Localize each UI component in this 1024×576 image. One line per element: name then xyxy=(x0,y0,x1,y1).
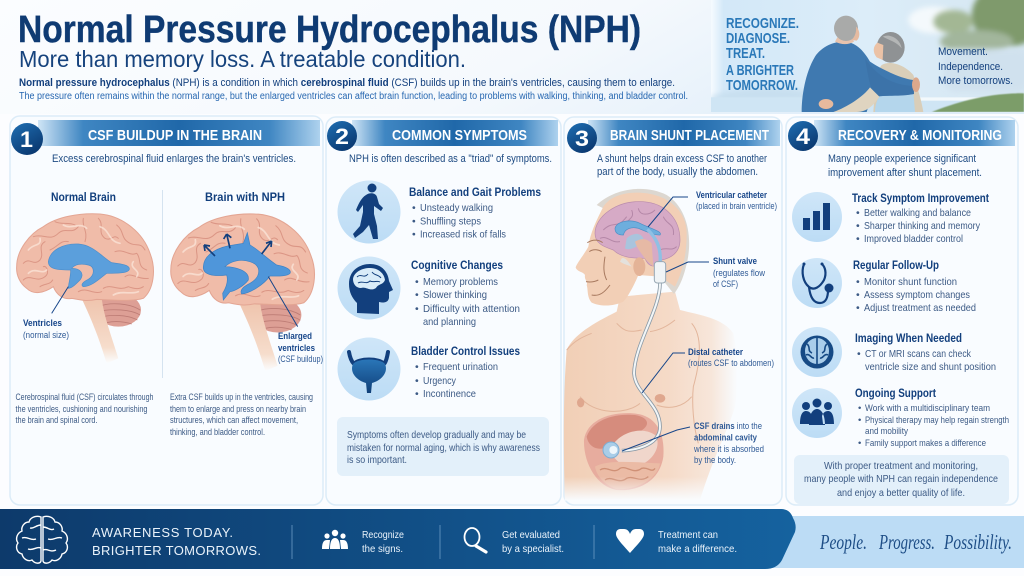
hero left text: A BRIGHTER xyxy=(726,62,794,79)
symptom: cognitive changes: and planning xyxy=(423,316,476,328)
item: regular follow-up: • xyxy=(856,276,860,288)
icon: people xyxy=(322,530,348,549)
panel 2: common symptoms xyxy=(326,117,561,505)
item: ongoing support: • xyxy=(858,438,861,449)
symptom: bladder control: Urgency xyxy=(423,375,457,387)
label: enlarged ventricles: (CSF buildup) xyxy=(278,354,323,364)
label: CSF drains: CSF drains into the xyxy=(694,421,762,431)
item: regular follow-up: Regular Follow-Up xyxy=(853,258,939,272)
label: ventricular catheter xyxy=(696,190,777,211)
item: ongoing support: • xyxy=(858,403,861,414)
panel 1 header: 1 xyxy=(20,127,33,152)
symptom: bladder control: Incontinence xyxy=(423,388,476,400)
symptom: balance and gait: • xyxy=(412,216,416,228)
illustration: brain with NPH xyxy=(171,214,314,371)
item: track symptom improvement: • xyxy=(856,207,860,219)
panel 3: brain shunt placement xyxy=(564,117,782,505)
text: extra CSF effects: them to enlarge and press on nearby brain xyxy=(170,404,306,415)
symptom: balance and gait: Increased risk of falls xyxy=(420,228,506,240)
symptom: cognitive changes: Slower thinking xyxy=(423,289,487,301)
panel 3 header: BRAIN SHUNT PLACEMENT xyxy=(610,127,769,144)
panel 3 intro: part of the body, usually the abdomen. xyxy=(597,166,758,178)
item: ongoing support: Family support makes a difference xyxy=(865,438,986,449)
label: ventricular catheter: Ventricular catheter xyxy=(696,190,767,201)
symptom: bladder control: Bladder Control Issues xyxy=(411,344,520,358)
illustration: man with shunt xyxy=(564,189,778,501)
panel 3 header: 3 xyxy=(575,126,589,151)
heading: normal brain: Normal Brain xyxy=(51,190,116,204)
symptom: cognitive changes xyxy=(411,258,520,328)
item: track symptom improvement: Track Symptom Improvement xyxy=(852,191,989,205)
symptom: balance and gait: Shuffling steps xyxy=(420,216,481,228)
panel 3 header xyxy=(567,120,780,153)
hero left text: TOMORROW. xyxy=(726,77,798,94)
symptom: balance and gait: • xyxy=(412,202,416,214)
symptom: balance and gait xyxy=(409,185,541,240)
symptom: cognitive changes: Cognitive Changes xyxy=(411,258,503,272)
item: ongoing support: Work with a multidisciplinary team xyxy=(865,403,990,414)
panel 3 intro xyxy=(597,153,767,178)
icon: brain outline xyxy=(17,516,67,563)
man xyxy=(802,16,920,112)
label: shunt valve: of CSF) xyxy=(713,279,738,289)
action: recognize: Recognize xyxy=(362,529,404,541)
label: CSF drains xyxy=(693,421,764,465)
icon: magnifier xyxy=(464,528,486,552)
label: CSF drains: abdominal cavity xyxy=(694,432,757,442)
symptom: cognitive changes: • xyxy=(415,276,419,288)
symptom: bladder control: • xyxy=(415,375,419,387)
hero left text: TREAT. xyxy=(726,45,765,62)
panel 4 header: 4 xyxy=(796,124,811,149)
symptom: balance and gait: Balance and Gait Problems xyxy=(409,185,541,199)
callout: awareness note: mistaken for normal aging, which is why awareness xyxy=(347,442,540,454)
label: shunt valve: Shunt valve xyxy=(713,256,757,267)
hero image: couple looking at landscape xyxy=(711,0,1024,112)
panel 4 intro xyxy=(828,153,982,179)
item: imaging when needed: ventricle size and shunt position xyxy=(865,361,996,373)
icon: walking person xyxy=(338,180,400,244)
text: normal CSF circulation: the brain and spinal cord. xyxy=(16,415,98,426)
symptom: bladder control: • xyxy=(415,361,419,373)
item: ongoing support: Ongoing Support xyxy=(855,386,936,400)
symptom: cognitive changes: • xyxy=(415,289,419,301)
item: regular follow-up: • xyxy=(856,289,860,301)
symptom: cognitive changes: • xyxy=(415,303,419,315)
panel 3 intro: A shunt helps drain excess CSF to another xyxy=(597,153,767,165)
item: track symptom improvement: Sharper thinking and memory xyxy=(864,220,981,232)
action: recognize xyxy=(362,529,404,555)
action: treatment: Treatment can xyxy=(658,529,718,541)
woman's arm xyxy=(819,87,879,112)
action: recognize: the signs. xyxy=(362,543,403,555)
item: regular follow-up: Assess symptom changes xyxy=(864,289,970,301)
callout: awareness note: Symptoms often develop gradually and may be xyxy=(347,429,526,441)
label: distal catheter: Distal catheter xyxy=(688,347,743,358)
icon: bar chart xyxy=(792,192,842,242)
slogan: Progress. xyxy=(878,530,935,554)
text: extra CSF effects: structures, which can affect movement, xyxy=(170,415,298,426)
panel 4 intro: improvement after shunt placement. xyxy=(828,167,982,179)
label: distal catheter: (routes CSF to abdomen) xyxy=(688,358,774,368)
label: enlarged ventricles xyxy=(278,331,323,364)
icon: bladder xyxy=(338,338,400,400)
hero right text: Movement. xyxy=(938,46,988,58)
panel 1 intro: Excess cerebrospinal fluid enlarges the brain's ventricles. xyxy=(52,153,296,165)
item: imaging when needed: • xyxy=(857,348,861,360)
label: CSF drains: where it is absorbed xyxy=(693,444,764,454)
item: track symptom improvement: • xyxy=(856,220,860,232)
panel 1: CSF buildup in the brain xyxy=(10,116,323,505)
callout: awareness note xyxy=(337,417,549,476)
illustration: normal brain xyxy=(17,214,153,363)
callout: quality of life: With proper treatment and monitoring, xyxy=(824,460,978,472)
icon: head with brain xyxy=(338,256,400,320)
intro text: Normal pressure hydrocephalus (NPH) is a condition in which cerebrospinal fluid (CSF) builds up in the brain's ventricles, causing them to enlarge. xyxy=(19,77,675,89)
subtitle: More than memory loss. A treatable condition. xyxy=(19,46,466,72)
text: normal CSF circulation xyxy=(16,392,154,426)
title: Normal Pressure Hydrocephalus (NPH) xyxy=(18,9,641,51)
panel 4 intro: Many people experience significant xyxy=(828,153,976,165)
item: ongoing support: • xyxy=(858,415,861,426)
hero right text xyxy=(938,46,1013,87)
icon: stethoscope xyxy=(792,258,842,308)
item: track symptom improvement: Better walking and balance xyxy=(864,207,971,219)
hero left text: RECOGNIZE. xyxy=(726,15,799,32)
action: treatment: make a difference. xyxy=(658,543,737,555)
footer banner xyxy=(0,509,1024,569)
slogan: People. xyxy=(819,530,867,554)
panel 1 header: CSF BUILDUP IN THE BRAIN xyxy=(88,127,262,144)
slogan xyxy=(819,530,1012,554)
symptom: bladder control: Frequent urination xyxy=(423,361,498,373)
label: ventricular catheter: (placed in brain ventricle) xyxy=(696,201,777,211)
item: ongoing support xyxy=(855,386,1009,449)
intro text xyxy=(19,77,688,102)
text: extra CSF effects: thinking, and bladder control. xyxy=(170,427,265,438)
label: shunt valve: (regulates flow xyxy=(713,268,765,278)
label: ventricles normal size xyxy=(23,318,69,340)
hero right text: Independence. xyxy=(938,61,1003,73)
action: treatment xyxy=(658,529,737,555)
trees xyxy=(933,0,1024,53)
callout: quality of life: and enjoy a better quality of life. xyxy=(837,487,965,499)
item: regular follow-up: Adjust treatment as needed xyxy=(864,302,976,314)
label: ventricles normal size: Ventricles xyxy=(23,318,62,329)
symptom: balance and gait: • xyxy=(412,228,416,240)
intro text: The pressure often remains within the normal range, but the enlarged ventricles can affect brain function, leading to problems with walking, thinking, and bladder control. xyxy=(19,91,688,102)
leader lines for shunt labels xyxy=(622,197,709,451)
footer tagline xyxy=(92,525,261,558)
icon: brain scan xyxy=(792,327,842,377)
panel 2 header xyxy=(327,120,558,151)
action: get evaluated: Get evaluated xyxy=(502,529,560,541)
item: regular follow-up xyxy=(853,258,976,314)
item: track symptom improvement: • xyxy=(856,233,860,245)
symptom: bladder control: • xyxy=(415,388,419,400)
panel 4 header xyxy=(788,120,1015,151)
item: regular follow-up: • xyxy=(856,302,860,314)
symptom: balance and gait: Unsteady walking xyxy=(420,202,493,214)
footer tagline: BRIGHTER TOMORROWS. xyxy=(92,543,261,558)
label: ventricles normal size: (normal size) xyxy=(23,330,69,340)
item: track symptom improvement xyxy=(852,191,989,245)
bush xyxy=(932,93,1024,112)
item: ongoing support: and mobility xyxy=(865,426,908,437)
label: shunt valve xyxy=(713,256,765,289)
text: extra CSF effects xyxy=(170,392,313,438)
icon: support group xyxy=(792,388,842,438)
item: imaging when needed: CT or MRI scans can check xyxy=(865,348,972,360)
action: get evaluated xyxy=(502,529,564,555)
woman xyxy=(873,32,923,112)
callout: quality of life xyxy=(794,455,1009,504)
label: enlarged ventricles: Enlarged xyxy=(278,331,312,342)
footer tagline: AWARENESS TODAY. xyxy=(92,525,233,540)
panel 2 intro: NPH is often described as a "triad" of symptoms. xyxy=(349,153,552,165)
action: get evaluated: by a specialist. xyxy=(502,543,564,555)
symptom: cognitive changes: Memory problems xyxy=(423,276,498,288)
heading: brain with NPH: Brain with NPH xyxy=(205,190,285,204)
item: regular follow-up: Monitor shunt function xyxy=(864,276,957,288)
symptom: cognitive changes: Difficulty with attention xyxy=(423,303,520,315)
item: imaging when needed xyxy=(855,331,996,373)
label: distal catheter xyxy=(688,347,774,368)
icon: heart xyxy=(616,529,644,553)
hero left text xyxy=(726,15,799,94)
label: CSF drains: by the body. xyxy=(694,455,736,465)
panel 2 header: 2 xyxy=(335,124,349,149)
symptom: bladder control xyxy=(411,344,520,400)
hero left text: DIAGNOSE. xyxy=(726,30,790,47)
item: track symptom improvement: Improved bladder control xyxy=(864,233,963,245)
item: imaging when needed: Imaging When Needed xyxy=(855,331,962,345)
label: enlarged ventricles: ventricles xyxy=(278,343,315,354)
hero right text: More tomorrows. xyxy=(938,75,1013,87)
text: normal CSF circulation: Cerebrospinal fluid (CSF) circulates through xyxy=(16,392,154,403)
panel 4: recovery and monitoring xyxy=(786,117,1018,505)
panel 1 header xyxy=(11,120,320,155)
callout: awareness note: is so important. xyxy=(347,454,407,466)
panel 2 header: COMMON SYMPTOMS xyxy=(392,127,527,144)
text: extra CSF effects: Extra CSF builds up in the ventricles, causing xyxy=(170,392,313,403)
text: normal CSF circulation: the ventricles, cushioning and nourishing xyxy=(16,404,148,415)
